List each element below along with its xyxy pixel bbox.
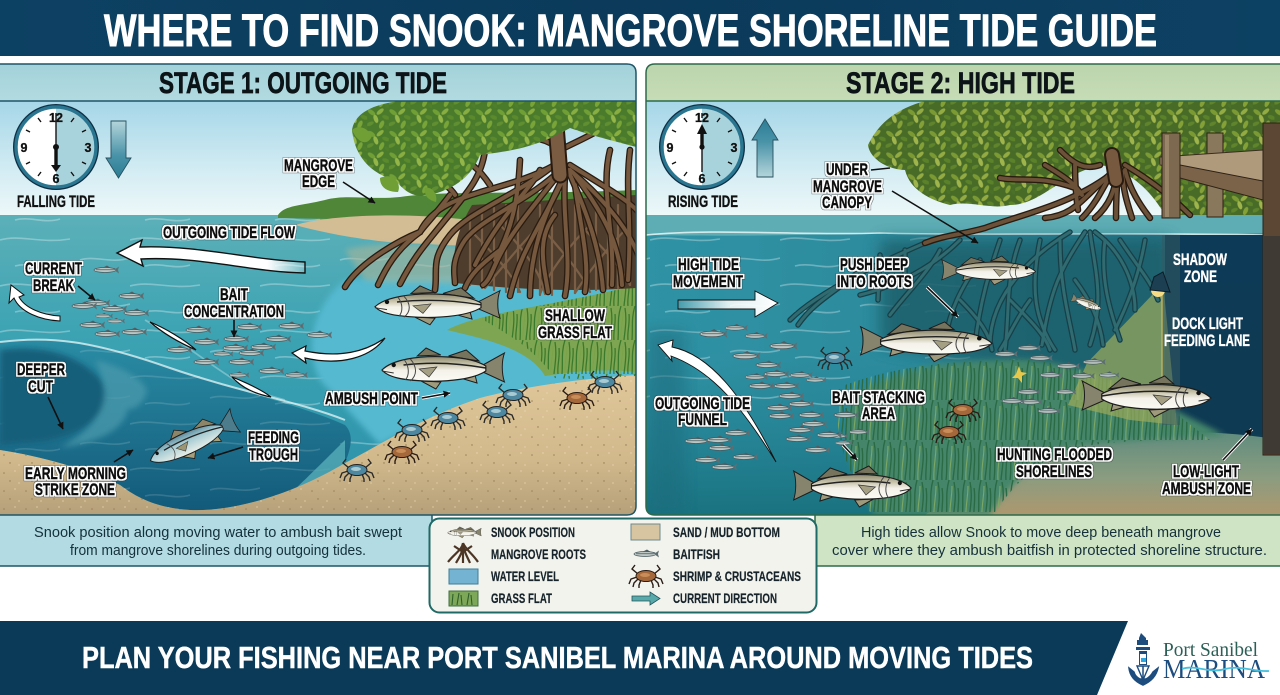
label: low-light ambush zone <box>1162 429 1252 498</box>
label: current break: BREAK <box>33 277 74 295</box>
legend icon: baitfish <box>634 550 659 558</box>
snook fish: root hunter <box>861 322 992 362</box>
clock: rising tide <box>660 105 744 189</box>
label: high tide movement <box>673 256 743 291</box>
label: current break: CURRENT <box>25 260 82 278</box>
label: bait stacking area <box>832 389 925 460</box>
surface shimmer <box>646 232 1265 235</box>
clock: rising tide: 6 <box>699 172 706 186</box>
label: early morning strike zone <box>25 450 133 499</box>
dock <box>1160 123 1280 455</box>
distant treeline <box>278 190 636 220</box>
ripple texture trough <box>0 350 342 498</box>
arrow: bait flow lower <box>232 377 271 397</box>
label: bait stacking area: AREA <box>862 405 895 423</box>
label: mangrove edge <box>284 157 375 203</box>
legend text: grass flat: GRASS FLAT <box>491 591 553 606</box>
snook fish: early morning strike <box>150 408 242 463</box>
deeper cut <box>0 349 108 445</box>
yellow starfish <box>1012 366 1027 383</box>
stage 1 header: STAGE 1: OUTGOING TIDE <box>159 67 447 100</box>
label: deeper cut: CUT <box>28 378 53 396</box>
label: push deep into roots: INTO ROOTS <box>837 273 912 291</box>
label: push deep into roots <box>837 256 958 317</box>
label: outgoing tide funnel: FUNNEL <box>678 411 727 429</box>
cut edge swirl <box>60 360 147 448</box>
label: low-light ambush zone: LOW-LIGHT <box>1173 463 1239 481</box>
small brown fish <box>1070 292 1103 314</box>
legend text: mangrove roots: MANGROVE ROOTS <box>491 547 586 562</box>
snook fish: near shore <box>375 286 500 325</box>
label: under mangrove canopy <box>813 161 978 243</box>
sand texture <box>0 375 636 515</box>
legend text: sand: SAND / MUD BOTTOM <box>673 525 780 540</box>
label: rising tide: RISING TIDE <box>668 193 738 211</box>
logo: Port Sanibel Marina: MARINA <box>1163 654 1265 684</box>
legend text: shrimp: SHRIMP & CRUSTACEANS <box>673 569 801 584</box>
water body <box>646 215 1280 515</box>
label: bait concentration: CONCENTRATION <box>184 303 284 321</box>
arrow: rising tide <box>752 119 778 177</box>
label: deeper cut <box>17 361 65 429</box>
arrow: current break eddy <box>9 285 60 321</box>
panel border stage 1 <box>0 64 636 515</box>
label: shadow zone: SHADOW <box>1173 251 1227 269</box>
water bottom shade <box>646 350 996 515</box>
mangrove roots <box>345 115 640 296</box>
label: under mangrove canopy: MANGROVE <box>813 178 882 196</box>
label: early morning strike zone: STRIKE ZONE <box>35 481 115 499</box>
ripple texture <box>0 218 450 496</box>
label: feeding trough <box>208 429 299 464</box>
root-water shade <box>880 240 1170 400</box>
label: hunting flooded shorelines: SHORELINES <box>1016 463 1092 481</box>
logo icon: lighthouse and anchor <box>1129 633 1158 685</box>
label: current break <box>25 260 95 300</box>
crabs in grass <box>818 347 980 444</box>
ripple texture <box>646 235 976 415</box>
snook fish: push deep <box>942 256 1036 285</box>
legend text: baitfish: BAITFISH <box>673 547 720 562</box>
label: hunting flooded shorelines <box>997 446 1112 481</box>
label: shallow grass flat: SHALLOW <box>545 307 605 325</box>
seabed sand <box>925 432 1280 515</box>
panel: caption strip stage 2: cover where they ambush baitfish in protected shoreline structure. <box>832 542 1267 559</box>
panel: caption strip stage 1: from mangrove shorelines during outgoing tides. <box>70 542 366 559</box>
water surface <box>0 215 636 515</box>
baitfish school: bait concentration <box>167 322 332 378</box>
legend icon: current arrow <box>632 592 660 605</box>
label: shallow grass flat <box>538 307 612 342</box>
label: under mangrove canopy: CANOPY <box>822 194 872 212</box>
label: shadow zone <box>1173 251 1227 286</box>
grass flat <box>447 285 636 379</box>
clock: rising tide: 3 <box>731 141 738 155</box>
clock: rising tide: 12 <box>695 111 709 125</box>
snook fish: bait stacking <box>794 466 911 507</box>
label: bait stacking area: BAIT STACKING <box>832 389 925 407</box>
underwater roots <box>790 232 1158 350</box>
label: bait concentration <box>184 286 284 337</box>
shore wedge <box>297 440 345 487</box>
trough <box>0 340 351 510</box>
label: ambush point: AMBUSH POINT <box>325 390 418 408</box>
label: high tide movement: HIGH TIDE <box>678 256 739 274</box>
label: outgoing tide funnel: OUTGOING TIDE <box>655 395 750 413</box>
label: outgoing tide flow: OUTGOING TIDE FLOW <box>163 224 295 242</box>
legend icon: mangrove roots <box>448 543 478 563</box>
far sand spit <box>296 215 462 246</box>
stage 2 header: STAGE 2: HIGH TIDE <box>846 67 1075 100</box>
root mass <box>454 195 636 290</box>
label: mangrove edge: EDGE <box>302 173 335 191</box>
dock light cone <box>1068 292 1177 425</box>
panel border stage 2 <box>646 64 1280 515</box>
sand beach <box>0 375 636 515</box>
clock: rising tide: 9 <box>667 141 674 155</box>
shallow water under the trees <box>312 275 636 445</box>
legend text: current: CURRENT DIRECTION <box>673 591 777 606</box>
submerged dock post shadow <box>1162 235 1180 425</box>
footer banner <box>0 621 1128 695</box>
sky <box>646 101 1280 217</box>
clock: falling tide: 12 <box>49 111 63 125</box>
panel: caption strip stage 2 <box>815 500 1280 566</box>
label: falling tide: FALLING TIDE <box>17 193 95 211</box>
panel: caption strip stage 1: Snook position along moving water to ambush bait swept <box>34 524 403 541</box>
arrow: bait flow <box>150 322 196 350</box>
label: early morning strike zone: EARLY MORNING <box>25 465 126 483</box>
mangrove canopy <box>352 101 640 202</box>
legend icon: sand <box>631 524 660 540</box>
left edge shade <box>646 330 686 515</box>
legend icon: crab <box>629 565 663 588</box>
legend text: water level: WATER LEVEL <box>491 569 559 584</box>
clock: falling tide <box>14 105 98 189</box>
label: shadow zone: ZONE <box>1184 268 1217 286</box>
legend icon: grass flat <box>449 591 478 606</box>
clock: falling tide: 9 <box>21 141 28 155</box>
legend icon: water level <box>449 569 478 584</box>
foam streak <box>145 320 285 400</box>
label: shallow grass flat: GRASS FLAT <box>538 324 612 342</box>
arrow: high tide movement <box>678 291 778 317</box>
seabed grass <box>846 359 1225 515</box>
footer banner: PLAN YOUR FISHING NEAR PORT SANIBEL MARINA AROUND MOVING TIDES <box>82 640 1033 675</box>
sky <box>0 101 636 217</box>
panel: stage 1 outgoing tide <box>0 64 640 515</box>
logo: Port Sanibel Marina: Port Sanibel <box>1163 639 1258 661</box>
legend icon: snook <box>448 527 481 538</box>
arrow: outgoing tide funnel <box>658 340 776 462</box>
above-water roots <box>925 150 1190 243</box>
logo: Port Sanibel Marina <box>1129 633 1269 685</box>
label: outgoing tide funnel <box>655 395 750 429</box>
stage 2 header <box>646 64 1280 101</box>
label: high tide movement: MOVEMENT <box>673 273 743 291</box>
panel: stage 2 high tide <box>646 64 1280 515</box>
label: dock light feeding lane <box>1164 315 1250 350</box>
clock: falling tide: 6 <box>53 172 60 186</box>
legend <box>430 518 816 612</box>
legend text: snook: SNOOK POSITION <box>491 525 575 540</box>
background roots <box>470 205 630 295</box>
label: hunting flooded shorelines: HUNTING FLOODED <box>997 446 1112 464</box>
crabs on beach <box>340 371 622 482</box>
label: bait concentration: BAIT <box>220 286 248 304</box>
baitfish school: current break <box>72 266 149 338</box>
arrow: toward concentration <box>292 338 385 363</box>
dock lamp <box>1150 272 1170 385</box>
logo wave <box>1182 668 1269 671</box>
panel: caption strip stage 1 <box>0 500 432 566</box>
mangrove canopy <box>868 101 1280 215</box>
snook fish: feeding lane <box>1082 376 1211 417</box>
label: feeding trough: TROUGH <box>249 446 298 464</box>
surf line <box>0 340 345 420</box>
seagrass blades <box>838 359 1210 512</box>
label: feeding trough: FEEDING <box>248 429 299 447</box>
shadow zone <box>1165 235 1280 515</box>
label: push deep into roots: PUSH DEEP <box>840 256 908 274</box>
tan shallows behind roots <box>345 244 480 285</box>
panel: caption strip stage 2: High tides allow Snook to move deep beneath mangrove <box>861 524 1221 541</box>
clock: falling tide: 3 <box>85 141 92 155</box>
snook fish: ambush point <box>382 348 504 389</box>
label: dock light feeding lane: DOCK LIGHT <box>1172 315 1243 333</box>
arrow: falling tide <box>106 121 131 178</box>
baitfish school: stacking <box>685 324 1119 470</box>
stage 1 header <box>0 64 638 101</box>
label: mangrove edge: MANGROVE <box>284 157 353 175</box>
label: under mangrove canopy: UNDER <box>826 161 868 179</box>
label: deeper cut: DEEPER <box>17 361 65 379</box>
arrow: outgoing tide flow <box>117 240 305 273</box>
surface band <box>646 215 1280 236</box>
